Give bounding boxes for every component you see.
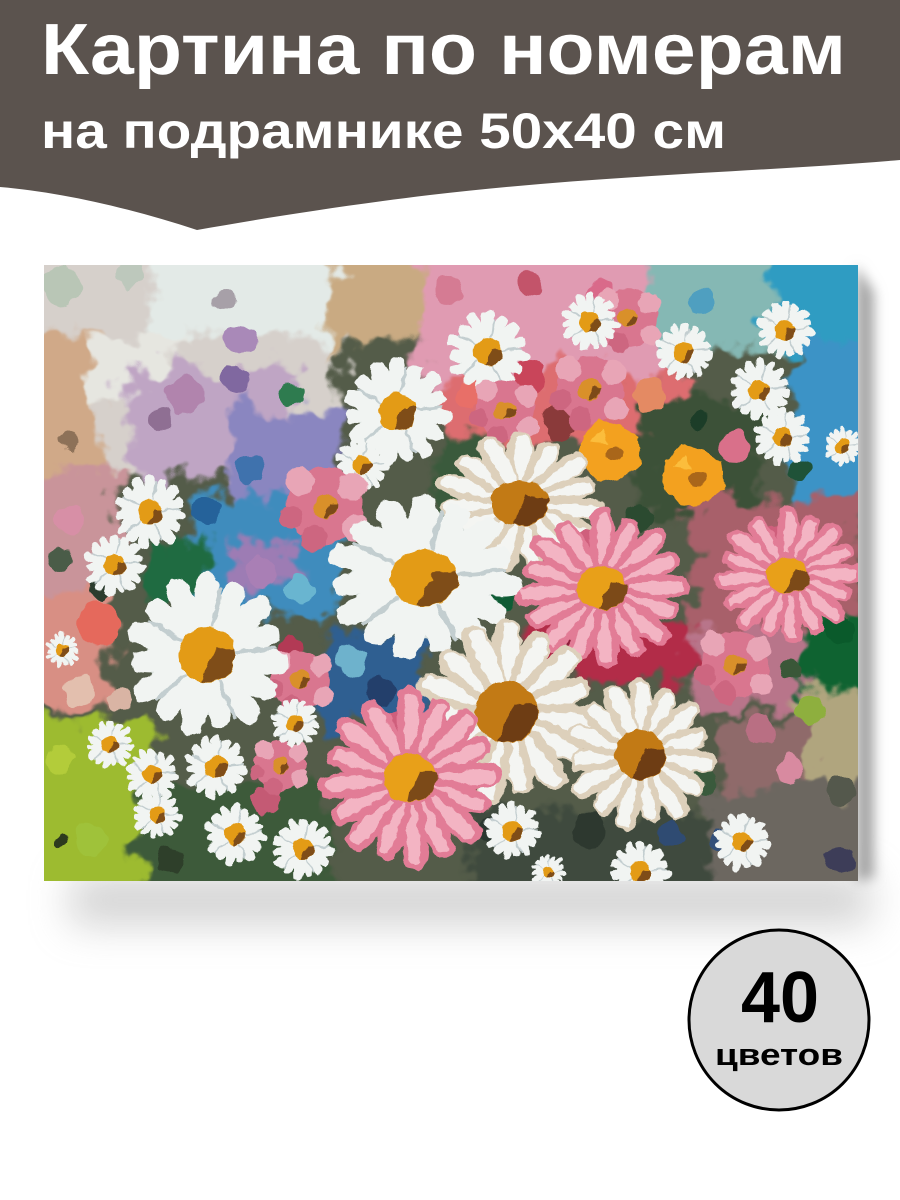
badge: 40 colours: 40 — [741, 958, 819, 1038]
title: Картина по номерам — [41, 10, 846, 90]
badge: 40 colours — [689, 930, 869, 1110]
painting: wildflower bouquet — [44, 265, 858, 881]
background flowers — [44, 288, 863, 904]
painted dabs — [40, 263, 856, 874]
badge: 40 colours: цветов — [715, 1037, 843, 1072]
large flowers — [124, 432, 863, 871]
painting background — [44, 265, 858, 881]
canvas drop shadow — [70, 265, 874, 925]
subtitle: на подрамнике 50х40 см — [41, 103, 726, 159]
header banner — [0, 0, 900, 230]
